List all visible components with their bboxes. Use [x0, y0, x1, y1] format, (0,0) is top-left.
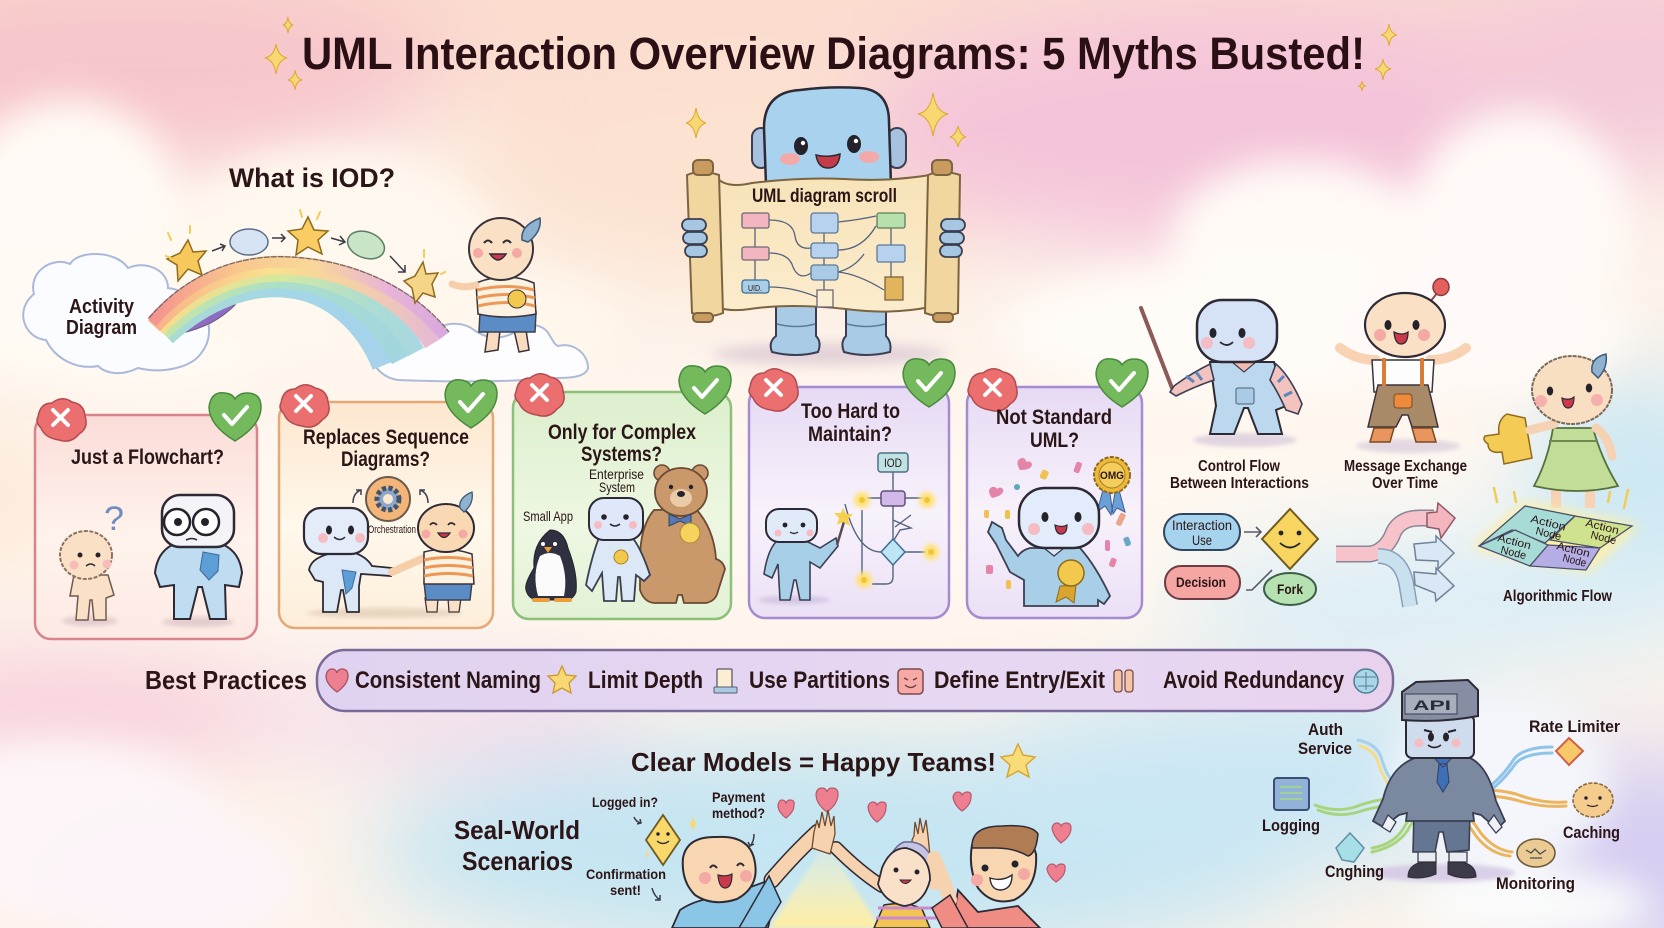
mini flow diagram: [845, 453, 939, 588]
character: robot: [586, 498, 650, 601]
node: Decision: [1165, 566, 1240, 599]
shadow: [712, 343, 948, 365]
captions: right concepts: Message Exchange: [1344, 458, 1467, 475]
glow: [770, 842, 880, 928]
label: Auth Service: [1298, 720, 1352, 758]
badge: OMG: [1094, 457, 1130, 515]
label: Cnghing: Cnghing: [1325, 862, 1384, 881]
icon: star: [548, 666, 576, 693]
legs: [1413, 812, 1470, 852]
real-world decision labels: Logged in?: [592, 794, 658, 810]
label: Activity Diagram: Diagram: [66, 317, 137, 339]
suit: [1373, 757, 1505, 829]
icon: myth X: [749, 369, 798, 411]
person: left: [672, 810, 835, 928]
robot legs: [771, 300, 890, 355]
node: Interaction Use: Interaction: [1172, 517, 1232, 533]
panel: Replaces Sequence Diagrams?: [279, 380, 497, 628]
character: confused cookie: [60, 500, 124, 626]
mat labels: Action: [1555, 540, 1591, 560]
question mark: ?: [104, 500, 124, 538]
heading: Only for Complex: [548, 421, 696, 444]
heading: Maintain?: [808, 423, 892, 446]
mat labels: Node: [1499, 544, 1527, 562]
character: feather kid on cloud: [452, 218, 540, 352]
panel: Just a Flowchart?: [35, 393, 261, 639]
person: right: [932, 826, 1040, 928]
characters: robot and kid shaking hands: [304, 492, 474, 618]
node: Fork: Fork: [1277, 581, 1303, 597]
icon: smiling cookie: [1573, 783, 1613, 817]
icon: globe: [1354, 669, 1378, 693]
badge: OMG: OMG: [1100, 470, 1124, 482]
illustration: rainbow bridge: [149, 257, 449, 366]
node: Interaction Use: [1164, 514, 1240, 550]
practice items: Limit Depth: [588, 667, 703, 694]
illustration: activity diagram cloud: [23, 254, 209, 373]
connectors: [1244, 527, 1272, 590]
icon: fact check: [679, 366, 731, 414]
icon: myth X: [515, 374, 564, 416]
illustration: right cloud: [371, 323, 588, 381]
node: Decision: Decision: [1176, 574, 1226, 590]
hearts: [778, 788, 1071, 882]
real-world decision labels: Confirmation: [586, 866, 666, 882]
service connection lines: [1315, 740, 1566, 856]
character: robot with glasses: [155, 495, 242, 627]
heading: Real-World Scenarios: Scenarios: [462, 846, 573, 876]
person: middle: [836, 818, 936, 928]
node: Interaction Use: Use: [1192, 532, 1212, 548]
heading: Systems?: [581, 443, 662, 466]
icon: rate limiter diamond: [1556, 738, 1583, 765]
mat labels: Node: [1534, 525, 1562, 543]
labels: Enterprise: [589, 466, 644, 482]
heading: Not Standard: [996, 406, 1112, 429]
robot ears: [752, 128, 906, 168]
mat labels: Node: [1589, 529, 1617, 547]
arrow heads: [1427, 503, 1455, 538]
icon: smiling diamond: [646, 815, 697, 865]
title: UML Interaction Overview Diagrams: 5 Myths Busted!: [302, 28, 1365, 79]
label: Caching: Caching: [1563, 823, 1620, 842]
labels: [523, 466, 644, 524]
icon: fact check: [1096, 359, 1148, 407]
heading: UML?: [1030, 429, 1079, 452]
practice items: [355, 667, 1345, 694]
pill: [317, 650, 1393, 711]
mat labels: Node: [1561, 552, 1587, 570]
icon: monitoring dial: [1517, 839, 1555, 867]
panel: Not Standard UML?: [967, 359, 1148, 618]
scroll mini diagram: [742, 213, 905, 307]
node: Fork: [1264, 573, 1316, 605]
API cap: [1402, 680, 1478, 721]
label: Monitoring: Monitoring: [1496, 874, 1575, 893]
practice items: Define Entry/Exit: [934, 667, 1105, 694]
labels: System: [599, 479, 635, 495]
character: bear: [640, 465, 725, 603]
confetti: [984, 458, 1132, 589]
IOD box: IOD: [884, 456, 902, 470]
icon: door pair: [1114, 670, 1133, 692]
practice items: Avoid Redundancy: [1163, 667, 1345, 694]
captions: right concepts: Over Time: [1372, 475, 1438, 492]
heading: [996, 406, 1112, 452]
title: [265, 17, 1397, 91]
icon: fact check: [445, 380, 497, 428]
labels: Small App: [523, 508, 573, 524]
character: robot with pointer: [1141, 300, 1302, 447]
real-world decision labels: method?: [712, 805, 765, 821]
label: Auth Service: Auth: [1308, 720, 1343, 739]
illustration: API gateway character: [1262, 680, 1620, 893]
label: Activity Diagram: Activity: [69, 296, 135, 318]
label: Best Practices: [145, 665, 307, 695]
captions: right concepts: Algorithmic Flow: [1503, 588, 1612, 605]
heading: Real-World Scenarios: [454, 815, 580, 876]
scroll label: UML diagram scroll: [752, 186, 897, 207]
character: penguin: [526, 530, 576, 600]
character: kid with antenna: [1340, 278, 1466, 453]
heading: Replaces Sequence: [303, 426, 469, 449]
mat labels: Action: [1529, 513, 1567, 534]
character: robot with wand: [758, 508, 853, 604]
section heading: What is IOD?: What is IOD?: [229, 163, 395, 193]
icon: fact check: [209, 393, 261, 441]
head: [1406, 715, 1474, 758]
sparkles: [686, 93, 966, 147]
real-world decision labels: sent!: [610, 882, 641, 898]
heading: [801, 400, 900, 446]
robot hands: [682, 219, 965, 257]
icon: orchestration gear: [353, 477, 428, 521]
character: robot holding scroll: [682, 87, 966, 365]
practice items: Use Partitions: [749, 667, 890, 694]
icon: crystal: [1336, 833, 1364, 862]
label: Logging: Logging: [1262, 816, 1320, 835]
label: Orchestration: Orchestration: [368, 524, 416, 536]
practice items: Consistent Naming: [355, 667, 541, 694]
heading: Too Hard to: [801, 400, 900, 423]
icon: myth X: [280, 385, 329, 427]
character: girl with puzzle piece on mat: [1471, 354, 1639, 572]
icon: myth X: [37, 399, 86, 441]
message fork arrows: [1336, 503, 1455, 606]
captions: right concepts: [1170, 458, 1612, 605]
heading: Just a Flowchart?: [71, 446, 224, 469]
heading: Diagrams?: [341, 448, 430, 471]
icon: myth X: [968, 369, 1017, 411]
label: Auth Service: Service: [1298, 739, 1352, 758]
label: Rate Limiter: Rate Limiter: [1529, 717, 1620, 736]
icon: star: [1001, 744, 1035, 777]
icon: heart: [326, 669, 348, 692]
captions: right concepts: Between Interactions: [1170, 475, 1309, 492]
control flow mini diagram: [1164, 509, 1318, 605]
callout: Clear Models = Happy Teams!: Clear Models = Happy Teams!: [631, 747, 996, 777]
API cap: API: [1413, 697, 1451, 713]
icon: logging panel: [1274, 778, 1309, 810]
icon: fact check: [903, 359, 955, 407]
label: Activity Diagram: [66, 296, 137, 339]
mat labels: Action: [1496, 532, 1532, 552]
panel: Only for Complex Systems?: [513, 366, 731, 619]
icon: title sparkles: [265, 17, 1397, 91]
scroll rollers: [687, 160, 960, 322]
real-world decision labels: Payment: [712, 789, 765, 805]
panel: Too Hard to Maintain?: [749, 359, 955, 618]
pointer stick: [1141, 308, 1172, 388]
icon: smiling box: [898, 669, 923, 694]
real-world decision labels: [586, 789, 765, 900]
panel: best practices: [145, 650, 1393, 711]
heading: [303, 426, 469, 471]
illustration: star and node flow: [166, 210, 445, 303]
illustration: team high five: [672, 788, 1071, 928]
icon: document: [714, 669, 737, 693]
puzzle mat: [1471, 488, 1639, 572]
character: cheering robot: [988, 488, 1110, 606]
mat labels: [1496, 513, 1620, 570]
scroll paper: [716, 175, 930, 312]
robot face: [780, 135, 879, 168]
heading: [548, 421, 696, 466]
captions: right concepts: Control Flow: [1198, 458, 1280, 475]
scroll mini diagram: UID.: [748, 284, 762, 293]
mat labels: Action: [1584, 517, 1620, 537]
node: smiling diamond: [1262, 509, 1318, 569]
heading: Real-World Scenarios: Seal-World: [454, 815, 580, 845]
robot head: [764, 87, 891, 185]
